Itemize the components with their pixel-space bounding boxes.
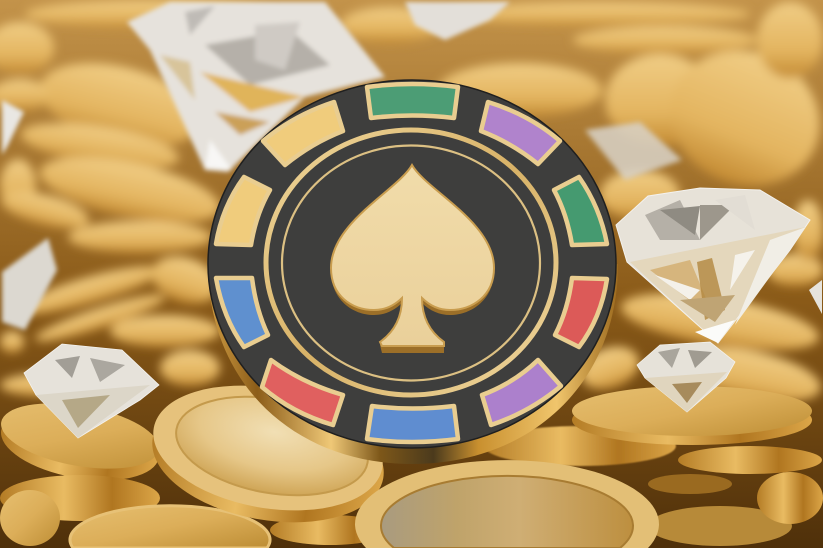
diamond: top fragment [405,2,510,40]
segment: left blue [216,278,268,347]
gold coin behind chip, left [142,369,394,539]
diamond: top centre large [127,2,385,172]
blurred diamonds in the background [2,2,682,330]
segment: bottom left red [262,360,343,425]
spade icon [331,165,494,346]
poker chip [208,80,618,464]
diamond: left edge top [2,100,24,155]
segment: left yellow [216,177,270,245]
diamond: right small [637,342,735,412]
mid-ground gold coins [0,386,823,548]
foreground gold coin: bottom centre [355,460,659,548]
segment: bottom right purple [482,360,561,425]
spade icon side [331,168,494,353]
diamond: left small [24,344,159,438]
diamond: blurred right of chip [585,122,682,180]
chip edge thickness [208,264,618,464]
outer gold ring [266,130,556,395]
thin inner ring [282,146,540,380]
segment: top right purple [481,102,560,164]
diamond: left edge middle [2,238,57,330]
diamond: right large [616,188,810,343]
chip colour segments [216,84,607,442]
segment: top green [367,84,458,118]
segment: bottom blue [367,406,458,442]
segment: top left yellow [263,102,343,165]
diamond: right edge fragment [809,280,822,314]
segment: right green [554,177,607,245]
chip face [208,80,616,448]
segment: right red [555,278,607,347]
